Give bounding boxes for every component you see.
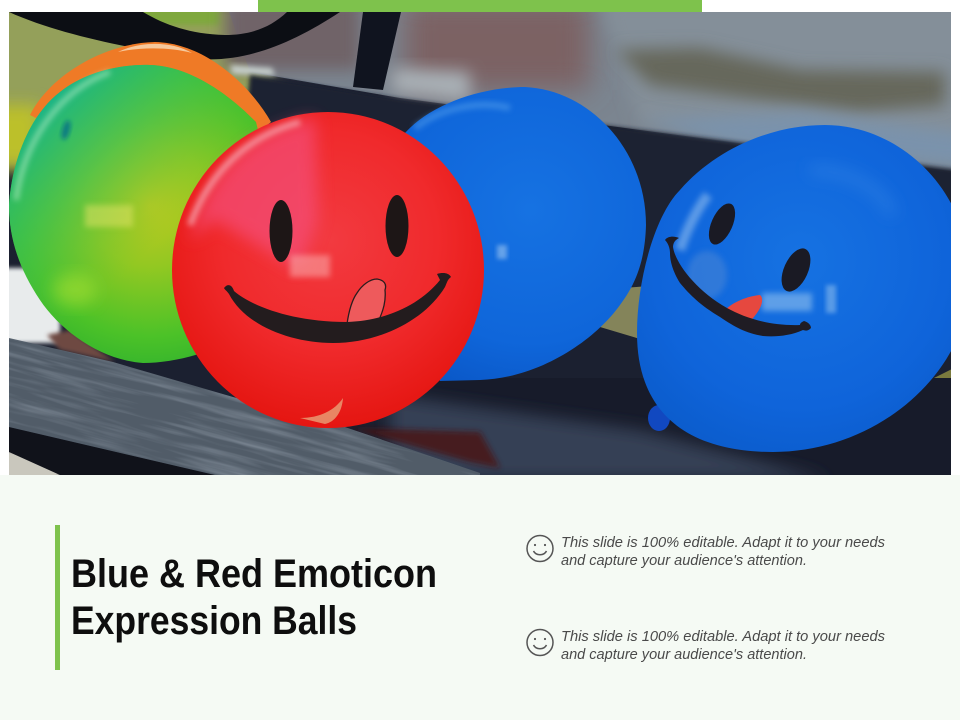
iron bench frame (9, 12, 401, 90)
photo: emoticon balloons on a bench (9, 12, 951, 475)
icon: smiley 2 (527, 630, 553, 656)
red balloon with smiling face (172, 112, 484, 428)
blue balloon tongue (727, 295, 762, 319)
blue balloon eyes (708, 204, 810, 292)
text block 1: and capture your audience's attention. (561, 553, 807, 569)
red balloon mouth (224, 273, 451, 343)
icon: smiley 1 (527, 536, 553, 562)
text block 1: This slide is 100% editable. Adapt it to your needs (561, 535, 885, 551)
title (71, 552, 437, 643)
red balloon eyes (270, 195, 408, 262)
title accent bar (55, 525, 60, 670)
blue balloon mouth (665, 237, 811, 336)
balloon knot (648, 405, 670, 431)
red balloon tongue (347, 279, 386, 324)
blue balloon, middle (400, 87, 646, 381)
text block 2 (561, 629, 885, 663)
top accent bar (258, 0, 702, 12)
green balloon (9, 64, 258, 363)
text block 2: This slide is 100% editable. Adapt it to your needs (561, 629, 885, 645)
text block 1 (561, 535, 885, 569)
photo backdrop (0, 0, 960, 480)
text block 2: and capture your audience's attention. (561, 647, 807, 663)
title: Expression Balls (71, 599, 357, 643)
title: Blue & Red Emoticon (71, 552, 437, 596)
bench plank (9, 338, 480, 475)
orange balloon (30, 42, 271, 135)
blue balloon with smiling face (637, 125, 960, 452)
lower background panel (0, 475, 960, 720)
